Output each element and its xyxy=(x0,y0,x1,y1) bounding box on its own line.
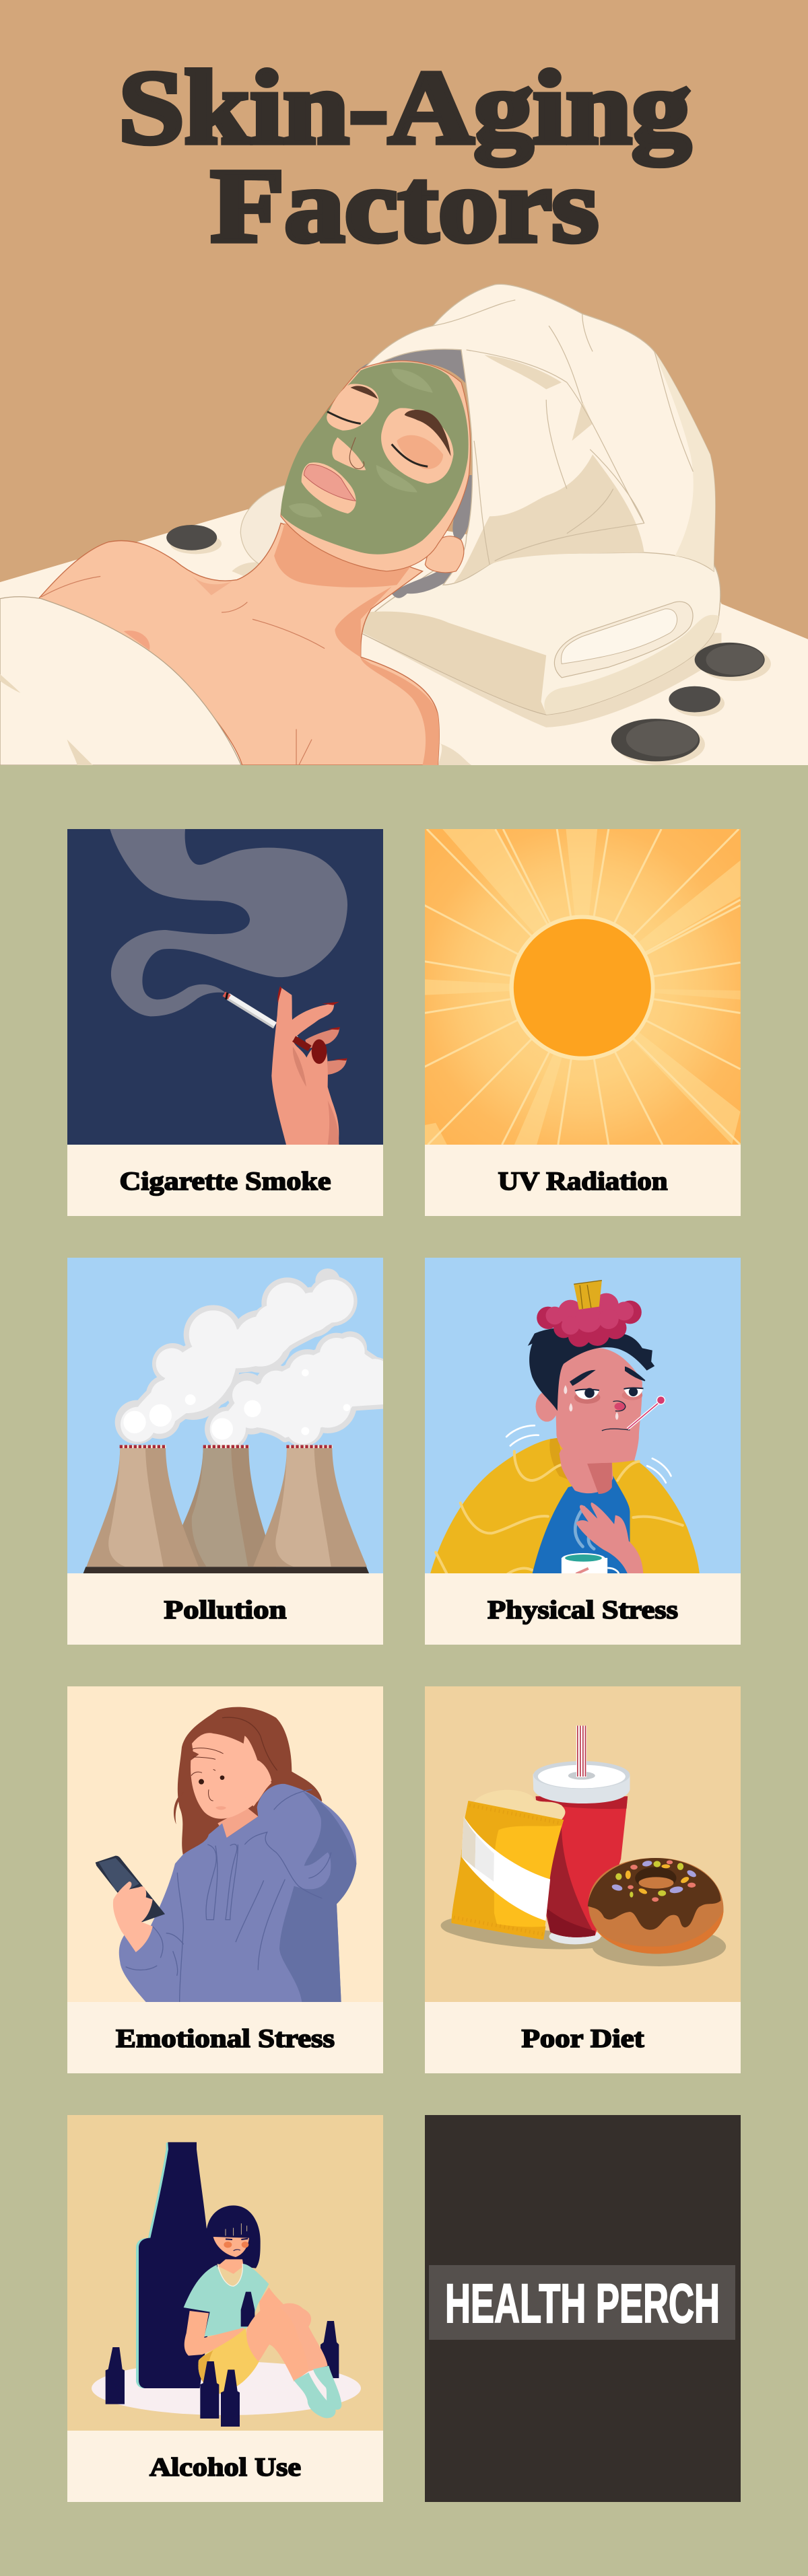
socks xyxy=(294,2366,341,2418)
lips xyxy=(304,464,356,501)
sun halo xyxy=(509,915,654,1061)
panel: physical stress xyxy=(425,1258,741,1645)
caption: Cigarette Smoke xyxy=(120,1167,331,1196)
mug xyxy=(561,1553,619,1576)
panel: cigarette smoke xyxy=(67,829,383,1216)
hand holding phone xyxy=(113,1882,153,1952)
ice bag cap xyxy=(574,1281,601,1310)
panel: UV radiation xyxy=(425,829,741,1216)
body and chest xyxy=(38,523,439,765)
ground strip xyxy=(83,1567,369,1574)
ice bag xyxy=(537,1281,641,1347)
shirt xyxy=(184,2264,269,2336)
thin rays xyxy=(424,829,740,1145)
shorts xyxy=(198,2328,259,2394)
face details xyxy=(191,1748,226,1810)
red tower rims xyxy=(120,1442,333,1452)
wide rays xyxy=(424,829,740,1145)
legs xyxy=(246,2303,328,2382)
hair xyxy=(207,2205,261,2268)
small neck pillow xyxy=(240,485,294,566)
neck xyxy=(217,1808,258,1838)
face xyxy=(281,361,471,571)
caption xyxy=(67,2431,383,2502)
eye, nose and mouth openings xyxy=(302,384,453,513)
caption: Pollution xyxy=(164,1596,287,1624)
face xyxy=(191,1754,271,1819)
illustration: sun with rays xyxy=(425,829,741,1145)
ear xyxy=(535,1391,558,1422)
floor ellipse xyxy=(92,2361,361,2415)
caption: Emotional Stress xyxy=(116,2024,335,2053)
grey hair xyxy=(356,346,473,598)
right small bottle xyxy=(321,2321,339,2378)
illustration: sick man with thermometer xyxy=(425,1258,741,1573)
hair xyxy=(178,1707,322,1855)
left tower xyxy=(86,1448,199,1567)
caption xyxy=(67,1145,383,1216)
steam xyxy=(575,1507,597,1549)
caption xyxy=(424,1573,741,1645)
giant bottle xyxy=(136,2142,217,2388)
panel: poor diet xyxy=(425,1686,741,2073)
title: Skin-Aging xyxy=(119,49,691,166)
illustration: cooling towers with smoke xyxy=(67,1258,383,1573)
right tower xyxy=(253,1448,367,1567)
sun disc xyxy=(513,919,650,1057)
donut xyxy=(587,1858,723,1954)
face details xyxy=(564,1367,644,1431)
caption: Poor Diet xyxy=(521,2024,644,2053)
hair xyxy=(527,1328,654,1411)
illustration: woman with face mask on spa table xyxy=(0,284,808,765)
caption: Alcohol Use xyxy=(149,2453,301,2482)
soda cup xyxy=(533,1725,630,1944)
blanket xyxy=(0,597,241,765)
smoke xyxy=(110,829,347,1016)
illustration: girl sitting among bottles xyxy=(67,2115,383,2431)
shirt xyxy=(532,1476,630,1574)
hoodie xyxy=(119,1784,356,2002)
shadows xyxy=(440,1919,726,1966)
turban towel xyxy=(361,284,715,585)
arms xyxy=(184,2311,244,2356)
chocolate glaze xyxy=(587,1858,720,1930)
logo band xyxy=(429,2265,735,2340)
title: Factors xyxy=(211,147,599,264)
caption: UV Radiation xyxy=(498,1167,667,1196)
table shadows xyxy=(170,534,771,765)
spa table xyxy=(0,503,808,765)
panel: Health Perch logo xyxy=(424,2115,741,2502)
chips bag xyxy=(451,1790,565,1940)
panel: hero header xyxy=(0,0,808,765)
hair strand xyxy=(222,1717,277,1770)
rolled towel xyxy=(361,544,720,715)
illustration: chips, soda and donut xyxy=(425,1686,741,2002)
eyebrows and lashes xyxy=(327,386,451,468)
sprinkles xyxy=(611,1860,697,1894)
head xyxy=(556,1348,642,1463)
illustration: hand with cigarette xyxy=(67,829,383,1145)
bottle in hand xyxy=(241,2292,255,2326)
title xyxy=(119,49,692,264)
caption xyxy=(67,2002,383,2073)
face xyxy=(213,2223,249,2274)
middle tower xyxy=(164,1448,276,1567)
panel: alcohol use xyxy=(67,2115,383,2502)
caption xyxy=(424,1145,741,1216)
cigarette xyxy=(224,993,296,1040)
cup lid xyxy=(533,1767,630,1803)
shiver marks xyxy=(506,1425,671,1482)
panel: emotional stress xyxy=(67,1686,383,2073)
panel: pollution xyxy=(67,1258,383,1645)
caption: Physical Stress xyxy=(487,1596,677,1624)
smoke clouds xyxy=(115,1268,403,1451)
blanket xyxy=(430,1438,699,1574)
small bottles xyxy=(106,2347,240,2427)
sweat drops xyxy=(564,1385,618,1420)
hand xyxy=(576,1503,643,1574)
hot stones xyxy=(166,525,765,761)
caption xyxy=(67,1573,383,1645)
lids xyxy=(397,435,443,469)
straw xyxy=(576,1725,586,1777)
ear xyxy=(425,536,464,573)
hand xyxy=(271,986,347,1145)
illustration: stressed woman with phone xyxy=(67,1686,383,2002)
caption xyxy=(424,2002,741,2073)
hand on forehead xyxy=(192,1733,271,1806)
green clay mask xyxy=(281,362,469,554)
thermometer xyxy=(628,1396,665,1429)
phone xyxy=(96,1856,165,1923)
neck xyxy=(559,1449,613,1494)
